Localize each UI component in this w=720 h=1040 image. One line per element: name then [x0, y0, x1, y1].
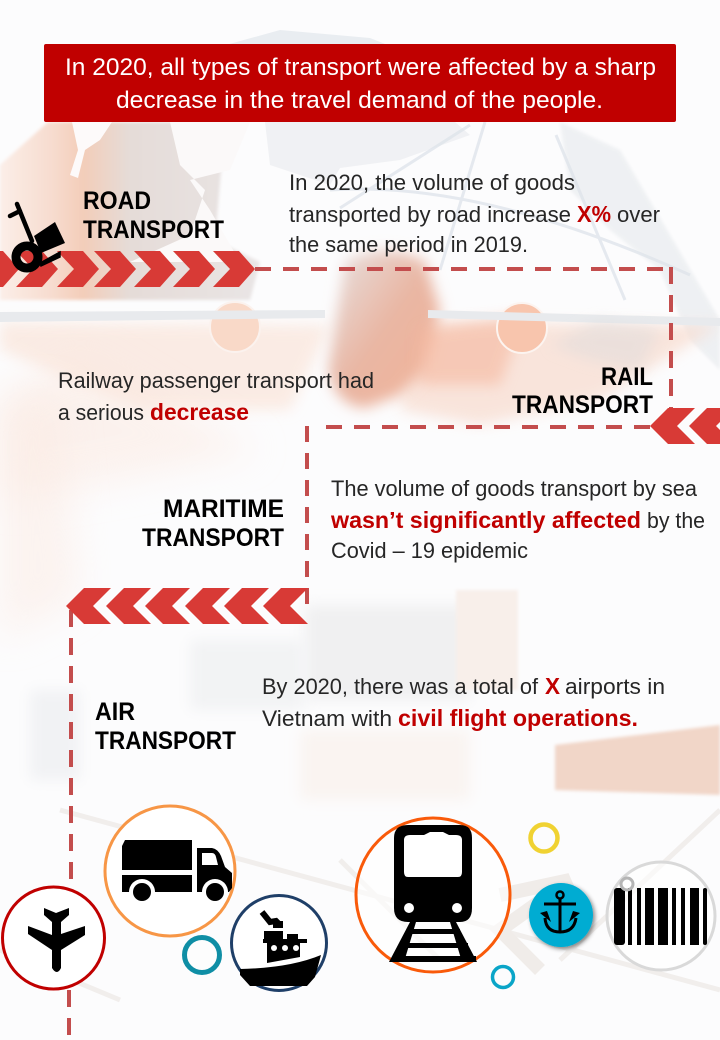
icon: truck [105, 806, 235, 936]
decorative ring: yellow [530, 824, 558, 852]
heading: air transport: AIR [95, 698, 135, 726]
text: maritime transport [330, 476, 705, 563]
heading: road transport: TRANSPORT [83, 216, 224, 244]
chevron arrow: maritime [66, 588, 308, 624]
text: air transport [262, 673, 665, 731]
plane [0, 251, 720, 500]
text: road transport: In 2020, the volume of goods [289, 170, 575, 195]
decorative ring: blue [492, 966, 514, 988]
text: road transport: over [617, 202, 660, 227]
heading: maritime transport: TRANSPORT [142, 524, 284, 552]
text: rail transport: a serious [58, 400, 144, 425]
heading: maritime transport: MARITIME [163, 495, 284, 523]
text: maritime transport: wasn’t significantly affected [330, 507, 641, 533]
text: road transport [289, 170, 660, 257]
text: maritime transport: The volume of goods transport by sea [331, 476, 698, 501]
icon: anchor [529, 883, 593, 947]
heading: rail transport: RAIL [601, 363, 653, 391]
icon: train [356, 818, 510, 972]
tarmac lines [0, 810, 720, 1000]
text: road transport: transported by road increase [289, 202, 571, 227]
text: road transport: the same period in 2019. [289, 232, 528, 257]
heading: road transport [83, 187, 224, 244]
heading: air transport [95, 698, 236, 755]
title banner: decrease in the travel demand of the people. [116, 87, 603, 114]
text: maritime transport: Covid – 19 epidemic [331, 538, 528, 563]
chevron arrow: rail [650, 408, 720, 444]
text: rail transport: Railway passenger transport had [58, 368, 374, 393]
title banner: In 2020, all types of transport were affected by a sharp [65, 54, 656, 81]
text: air transport: civil flight operations. [398, 705, 638, 731]
dashed route connector [69, 267, 671, 1036]
text: air transport: By 2020, there was a total of [262, 674, 539, 699]
chevron arrow: road [0, 251, 255, 287]
decorative ring: teal [184, 938, 220, 972]
icon: barcode [607, 862, 715, 970]
globe [0, 30, 720, 370]
icon: airplane [2, 887, 104, 989]
icon: ship [232, 896, 326, 990]
text: rail transport: decrease [150, 399, 249, 425]
heading: maritime transport [142, 495, 284, 552]
text: air transport: Vietnam with [262, 706, 392, 731]
text: air transport: X [545, 673, 561, 699]
text: air transport: airports in [565, 674, 665, 699]
heading: rail transport: TRANSPORT [512, 391, 653, 419]
text: rail transport [58, 368, 374, 425]
text: road transport: X% [577, 201, 611, 227]
heading: rail transport [512, 363, 653, 419]
truck fleet [0, 390, 720, 800]
heading: air transport: TRANSPORT [95, 727, 236, 755]
text: maritime transport: by the [647, 508, 705, 533]
icon: hand truck [10, 204, 65, 268]
heading: road transport: ROAD [83, 187, 151, 215]
title banner [44, 44, 676, 122]
